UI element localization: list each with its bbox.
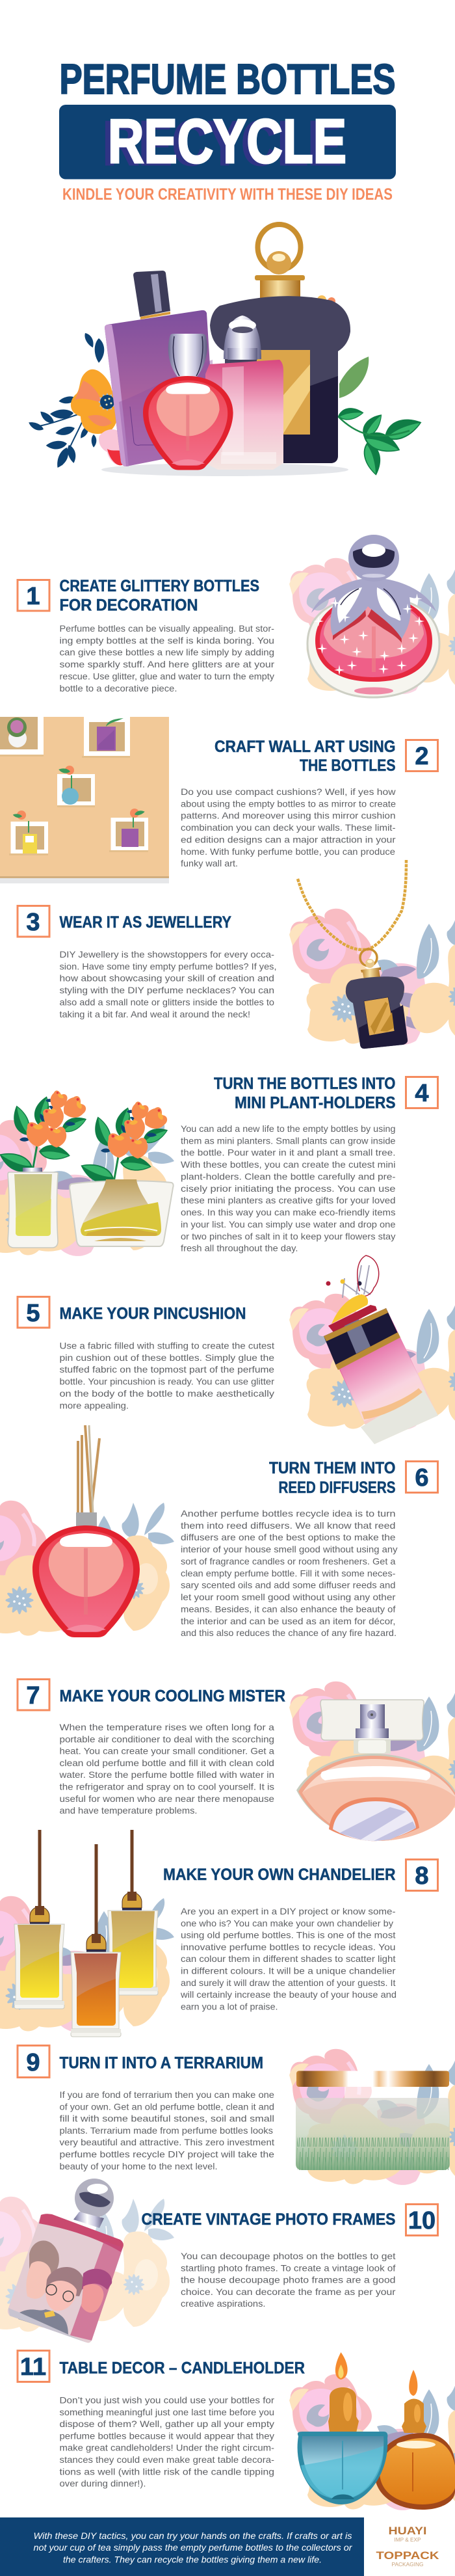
yellow bottle left bbox=[14, 1906, 64, 2009]
section 4: plant holders bbox=[0, 1075, 438, 1256]
text 2: Do you use compact cushions? Well, if yes how bbox=[181, 786, 396, 797]
orange bottle middle bbox=[71, 1934, 121, 2037]
text 4 bbox=[181, 1123, 396, 1254]
heading 7: MAKE YOUR COOLING MISTER bbox=[60, 1687, 285, 1706]
number badge 3: 3 bbox=[26, 909, 40, 936]
text 11: make great candleholders! Under the right circum- bbox=[60, 2443, 274, 2453]
number badge 4 bbox=[406, 1077, 438, 1108]
text 8: in different colours. It will be a unique chandelier bbox=[181, 1966, 396, 1976]
text 7: water. Store the perfume bottle filled with water in bbox=[58, 1769, 274, 1780]
text 2: about using the empty bottles to as mirror to create bbox=[181, 798, 396, 809]
text 1: some sparkly stuff. And here glitters are at your bbox=[60, 659, 274, 669]
text 4: plant-holders. Clean the bottle carefully and pre- bbox=[181, 1171, 396, 1181]
text 7: the refrigerator and spray on to cool yourself. It is bbox=[60, 1781, 274, 1791]
illustration: wall with framed bottles bbox=[0, 717, 169, 883]
text 7: and have temperature problems. bbox=[60, 1805, 198, 1816]
hero illustration: perfume bottles with flowers bbox=[27, 224, 424, 477]
text 8: Are you an expert in a DIY project or know some- bbox=[181, 1906, 396, 1916]
text 10: creative aspirations. bbox=[181, 2298, 265, 2309]
text 9: perfume bottles recycle DIY project will take the bbox=[60, 2149, 274, 2160]
heading 4: MINI PLANT-HOLDERS bbox=[235, 1094, 395, 1112]
illustration: chandelier bottles bbox=[0, 1830, 174, 2037]
text 6: sort of fragrance candles or room fresheners. Get a bbox=[181, 1556, 396, 1566]
text 11: tions as well (with little risk of the candle tipping bbox=[60, 2466, 274, 2476]
heading 3: WEAR IT AS JEWELLERY bbox=[60, 913, 231, 932]
text 7: When the temperature rises we often long for a bbox=[60, 1722, 274, 1732]
number badge 9: 9 bbox=[26, 2049, 40, 2076]
text 1: rescue. Use glitter, glue and water to turn the empty bbox=[60, 671, 274, 682]
text 5: bottle. Your pincushion is ready. You can use glitter bbox=[60, 1376, 274, 1387]
text 8 bbox=[180, 1906, 396, 2011]
text 3: taking it a bit far. And weal it around the neck! bbox=[60, 1009, 250, 1019]
text 2: patterns. And moreover using this mirror cushion bbox=[181, 811, 395, 821]
text 5: Use a fabric filled with stuffing to create the cutest bbox=[60, 1340, 274, 1350]
section 9: terrarium bbox=[18, 2045, 455, 2185]
text 6: them into reed diffusers. We all know that reed bbox=[181, 1520, 395, 1531]
illustration: cooling mister bbox=[289, 1682, 455, 1841]
logos: HUAYI bbox=[389, 2525, 426, 2537]
text 6: let your room smell good without using any other bbox=[181, 1592, 396, 1602]
number badge 6 bbox=[406, 1461, 438, 1492]
text 4: or two pinches of salt in it to keep your flowers stay bbox=[181, 1231, 395, 1241]
banner: RECYCLE: RECYCLE bbox=[108, 107, 346, 176]
heading 2: CRAFT WALL ART USING bbox=[214, 738, 395, 756]
section 11: candleholder bbox=[18, 2351, 455, 2510]
text 8: innovative perfume bottles to recycle ideas. You bbox=[181, 1942, 395, 1952]
text 3: styling with the DIY perfume necklaces? You can bbox=[60, 985, 274, 995]
text 1 bbox=[60, 623, 274, 693]
black bottle with gold ring bbox=[210, 224, 350, 463]
number badge 1: 1 bbox=[26, 583, 40, 610]
section 1: glittery bottles bbox=[18, 535, 455, 697]
text 4: You can add a new life to the empty bottles by using bbox=[181, 1123, 395, 1134]
text 1: Perfume bottles can be visually appealing. But stor- bbox=[60, 623, 274, 634]
conclusion footer bbox=[0, 2517, 364, 2576]
section 6: reed diffusers bbox=[0, 1425, 438, 1638]
number badge 2: 2 bbox=[415, 743, 429, 770]
text 8: earn you a lot of praise. bbox=[181, 2001, 278, 2011]
text 11: over during dinner!). bbox=[60, 2478, 146, 2489]
number badge 10: 10 bbox=[408, 2207, 436, 2234]
text 6: means. Besides, it can also enhance the beauty of bbox=[181, 1604, 396, 1615]
text 2 bbox=[181, 786, 396, 868]
text 7 bbox=[58, 1722, 274, 1816]
text 11: perfume bottles because it would appear that they bbox=[60, 2430, 274, 2441]
logos: TOPPACK bbox=[376, 2549, 439, 2562]
section 3: jewellery bbox=[18, 860, 455, 1049]
text 6: Another perfume bottles recycle idea is to turn bbox=[181, 1508, 395, 1518]
text 5: pin cushion out of these bottles. Simply glue the bbox=[60, 1352, 274, 1363]
section 8: chandelier bbox=[0, 1830, 438, 2037]
text 8: can colour them in different shades to scatter light bbox=[181, 1953, 396, 1964]
text 4: these mini planters as creative gifts for your loved bbox=[181, 1195, 395, 1205]
yellow bottle right bbox=[108, 1892, 158, 1995]
number badge 7 bbox=[18, 1680, 49, 1710]
text 10: You can decoupage photos on the bottles to get bbox=[181, 2251, 396, 2261]
text 9: plants. Terrarium made from perfume bottles looks bbox=[60, 2125, 273, 2136]
text 5: stuffed fabric on the topmost part of the perfume bbox=[60, 1364, 274, 1375]
heading 1: FOR DECORATION bbox=[60, 596, 198, 614]
text 10: startling photo frames. To create a vintage look of bbox=[181, 2262, 396, 2273]
text 11: something meaningful just one last time before you bbox=[60, 2407, 274, 2417]
number badge 5 bbox=[18, 1297, 49, 1328]
subtitle: KINDLE YOUR CREATIVITY WITH THESE DIY IDEAS bbox=[62, 185, 393, 204]
number badge 6: 6 bbox=[415, 1464, 429, 1492]
illustration: perfume necklace bbox=[289, 860, 455, 1049]
heading 2: THE BOTTLES bbox=[300, 757, 395, 775]
text 6: and this also reduces the chance of any fire hazard. bbox=[181, 1628, 396, 1638]
heading 1 bbox=[60, 577, 259, 614]
text 4: in your list. You can simply use water and drop one bbox=[181, 1219, 396, 1229]
heading 5: MAKE YOUR PINCUSHION bbox=[60, 1305, 246, 1323]
number badge 9 bbox=[18, 2045, 49, 2078]
text 9: fill it with some beautiful stones, soil and small bbox=[60, 2113, 274, 2124]
text 11: Don’t you just wish you could use your bottles for bbox=[60, 2395, 274, 2406]
heading 6 bbox=[269, 1459, 395, 1497]
illustration: bottles with plants bbox=[0, 1089, 174, 1256]
text 6: clean empty perfume bottle. Fill it with some neces- bbox=[181, 1568, 396, 1578]
text 10 bbox=[181, 2251, 396, 2309]
text 1: ing empty bottles at the self is kinda boring. You bbox=[60, 635, 274, 645]
banner: RECYCLE: RECYCLE bbox=[103, 109, 341, 178]
pink bottle bbox=[205, 315, 283, 470]
text 5: more appealing. bbox=[60, 1400, 129, 1410]
text 4: them as mini planters. Small plants can grow inside bbox=[181, 1135, 396, 1146]
heading 10: CREATE VINTAGE PHOTO FRAMES bbox=[142, 2210, 395, 2229]
text 2: combination you can deck your walls. These limit- bbox=[181, 822, 396, 833]
heading 4 bbox=[214, 1075, 395, 1112]
text 3: how about showcasing your skill of creation and bbox=[60, 973, 274, 984]
text 7: useful for women who are near there menopause bbox=[60, 1793, 274, 1804]
text 4: ones. In this way you can make eco-friendly items bbox=[181, 1207, 395, 1218]
conclusion footer: not your cup of tea simply pass the empty perfume bottles to the collectors or bbox=[34, 2542, 353, 2553]
text 5 bbox=[60, 1340, 274, 1410]
heading 9: TURN IT INTO A TERRARIUM bbox=[60, 2054, 263, 2073]
text 10: the house decoupage photo frames are a good bbox=[181, 2275, 395, 2285]
number badge 11: 11 bbox=[20, 2354, 46, 2381]
text 7: clean old perfume bottle and fill it with clean cold bbox=[60, 1758, 274, 1768]
illustration: glitter bottle bbox=[289, 535, 455, 697]
text 3 bbox=[60, 949, 277, 1019]
number badge 3 bbox=[18, 906, 49, 937]
logos: IMP & EXP bbox=[394, 2537, 421, 2543]
logos: PACKAGING bbox=[391, 2562, 424, 2568]
number badge 4: 4 bbox=[415, 1080, 429, 1107]
illustration: pincushion bottle bbox=[289, 1255, 455, 1444]
text 6: the interior and can be used as an item for décor, bbox=[181, 1616, 395, 1626]
red bottle bbox=[143, 334, 233, 470]
heading 4: TURN THE BOTTLES INTO bbox=[214, 1075, 395, 1093]
text 9: of your own. Get an old perfume bottle, clean it and bbox=[60, 2101, 274, 2112]
number badge 5: 5 bbox=[26, 1300, 40, 1327]
text 6: sary scented oils and add some diffuser reeds and bbox=[181, 1580, 395, 1590]
text 11: dispose of them? Well, gather up all your empty bbox=[60, 2419, 274, 2429]
text 4: cisely prior initiating the process. You can use bbox=[181, 1183, 396, 1194]
conclusion footer: With these DIY tactics, you can try your hands on the crafts. If crafts or art is bbox=[34, 2530, 352, 2541]
text 7: portable air conditioner to deal with the scorching bbox=[60, 1734, 274, 1744]
text 9: beauty of your home to the next level. bbox=[60, 2161, 217, 2171]
section 10: photo frames bbox=[0, 2179, 438, 2343]
logos bbox=[376, 2525, 439, 2568]
text 9 bbox=[60, 2089, 274, 2171]
section 5: pincushion bbox=[18, 1255, 455, 1444]
heading 1: CREATE GLITTERY BOTTLES bbox=[60, 577, 259, 595]
text 3: DIY Jewellery is the showstoppers for every occa- bbox=[60, 949, 274, 959]
purple bottle bbox=[105, 271, 215, 466]
text 9: very beautiful and attractive. This zero investment bbox=[60, 2137, 274, 2147]
number badge 2 bbox=[406, 740, 438, 771]
text 7: heat. You can create your small conditioner. Get a bbox=[60, 1746, 274, 1756]
heading 6: REED DIFFUSERS bbox=[278, 1479, 395, 1497]
text 3: also add a small note or glitters inside the bottles to bbox=[60, 997, 274, 1007]
text 10: choice. You can decorate the frame as per your bbox=[181, 2287, 396, 2297]
text 2: funky wall art. bbox=[181, 858, 238, 868]
number badge 8: 8 bbox=[415, 1862, 429, 1890]
heading 8: MAKE YOUR OWN CHANDELIER bbox=[163, 1866, 395, 1884]
text 1: bottle to a decorative piece. bbox=[60, 683, 177, 693]
section 2: wall art bbox=[0, 717, 438, 883]
number badge 8 bbox=[406, 1859, 438, 1890]
text 1: can give these bottles a new life simply by adding bbox=[60, 647, 274, 658]
text 11 bbox=[60, 2395, 274, 2489]
text 8: using old perfume bottles. This is one of the most bbox=[181, 1930, 396, 1940]
text 11: stances they could even make great table decora- bbox=[60, 2454, 274, 2465]
illustration: terrarium bottle bbox=[289, 2049, 455, 2185]
text 2: home. With funky perfume bottle, you can produce bbox=[181, 846, 395, 857]
section 7: cooling mister bbox=[18, 1680, 455, 1841]
heading 2 bbox=[214, 738, 395, 775]
text 8: and surely it will draw the attention of your guests. It bbox=[181, 1978, 396, 1988]
text 6: interior of your house smell good without using any bbox=[181, 1544, 398, 1555]
text 9: If you are fond of terrarium then you can make one bbox=[60, 2089, 274, 2100]
text 4: fresh all throughout the day. bbox=[181, 1243, 298, 1254]
number badge 1 bbox=[18, 580, 49, 611]
number badge 7: 7 bbox=[26, 1682, 40, 1710]
text 4: the bottle. Pour water in it and plant a small tree. bbox=[181, 1147, 395, 1158]
text 3: sion. Have some tiny empty perfume bottles? If yes, bbox=[60, 961, 277, 971]
heading 6: TURN THEM INTO bbox=[269, 1459, 395, 1477]
heading 11: TABLE DECOR – CANDLEHOLDER bbox=[60, 2359, 305, 2377]
text 8: one who is? You can make your own chandelier by bbox=[181, 1918, 393, 1928]
conclusion footer: the crafters. They can recycle the bottles giving them a new life. bbox=[63, 2554, 322, 2564]
text 6: diffusers are one of the best options to make the bbox=[181, 1532, 396, 1542]
illustration: reed diffuser bbox=[0, 1425, 174, 1637]
text 2: ed edition designs can a major attraction in your bbox=[181, 834, 396, 844]
text 6 bbox=[181, 1508, 398, 1638]
illustration: photo bottle bbox=[0, 2179, 174, 2343]
text 4: With these bottles, you can create the cutest mini bbox=[181, 1159, 395, 1170]
text 8: will certainly increase the beauty of your house and bbox=[180, 1989, 396, 2000]
text 5: on the body of the bottle to make aesthetically bbox=[60, 1388, 274, 1399]
illustration: candleholders bbox=[289, 2352, 455, 2510]
